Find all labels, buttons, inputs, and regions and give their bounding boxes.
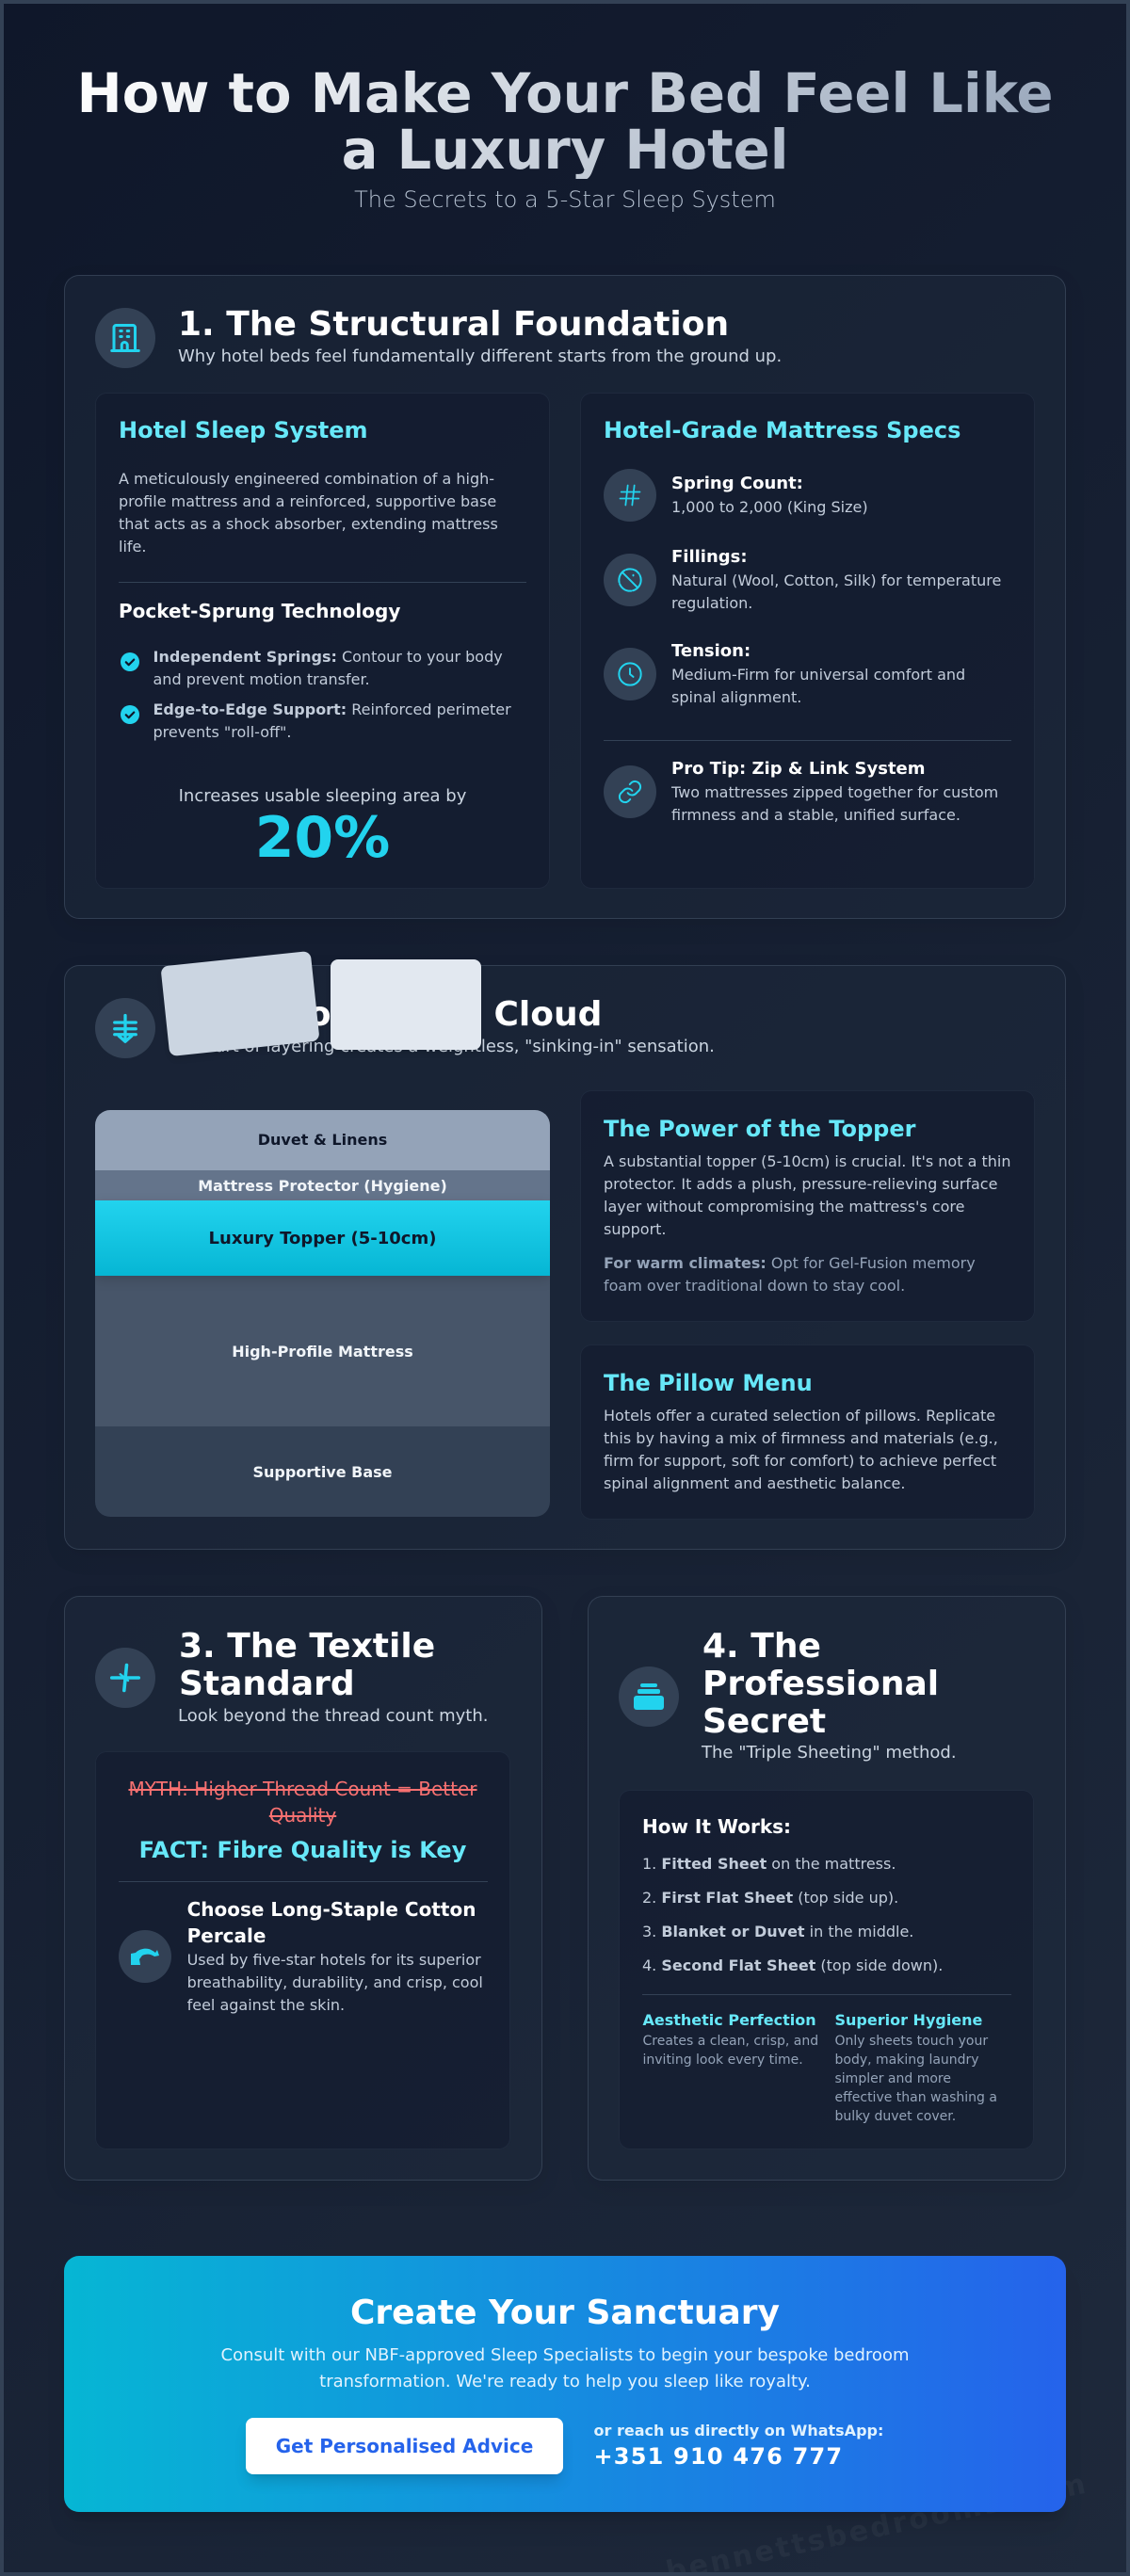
paragraph: profile mattress and a reinforced, supportive base (119, 492, 496, 510)
layer: base (95, 1426, 550, 1517)
benefit: hygiene: effective than washing a (834, 2090, 997, 2105)
panel: mattress specs: Medium-Firm for universal comfort and (671, 666, 965, 684)
bullet 1: Independent Springs: Contour to your body (153, 648, 503, 666)
layer: duvet: Duvet & Linens (258, 1130, 387, 1149)
heading: Professional (702, 1665, 939, 1703)
benefit: aesthetic (642, 2011, 818, 2068)
title: a Luxury Hotel (342, 119, 788, 182)
cta text: Consult with our NBF-approved Sleep Specialists to begin your bespoke bedroom (220, 2345, 910, 2365)
icon: sheets stack (619, 1666, 679, 1727)
header (76, 62, 1054, 213)
cta text (220, 2345, 910, 2391)
heading: 4. The (702, 1627, 821, 1666)
phone: +351 910 476 777 (593, 2443, 843, 2470)
subheading: Look beyond the thread count myth. (178, 1706, 488, 1726)
paragraph (604, 1407, 998, 1492)
panel: mattress specs: Natural (Wool, Cotton, Silk) for temperature (671, 572, 1001, 589)
benefit: aesthetic: inviting look every time. (642, 2053, 803, 2068)
cta text: transformation. We're ready to help you sleep like royalty. (319, 2372, 811, 2391)
title: How to Make Your Bed Feel Like (76, 62, 1054, 125)
myth: Quality (269, 1804, 336, 1827)
icon: check 2 (121, 705, 139, 724)
layer: protector (95, 1170, 550, 1200)
bullet 2: Edge-to-Edge Support: Reinforced perimeter (153, 700, 511, 718)
benefit: hygiene: body, making laundry (834, 2053, 979, 2068)
panel: pillow menu (580, 1344, 1035, 1520)
feature title: Percale (187, 1924, 266, 1947)
card heading: How It Works: (642, 1815, 791, 1838)
step 3: 3. Blanket or Duvet in the middle. (642, 1923, 913, 1940)
panel: mattress specs: 1,000 to 2,000 (King Size) (671, 498, 868, 516)
layer: mattress: High-Profile Mattress (232, 1343, 413, 1360)
paragraph: life. (119, 538, 146, 555)
icon: hash (604, 469, 656, 522)
paragraph: this by having a mix of firmness and materials (e.g., (604, 1429, 998, 1447)
bullet 1 (153, 648, 503, 688)
layer: topper: Luxury Topper (5-10cm) (209, 1228, 436, 1248)
icon: clock (604, 648, 656, 700)
paragraph: A substantial topper (5-10cm) is crucial. It's not a thin (604, 1152, 1010, 1170)
feature text: breathability, durability, and crisp, cool (187, 1973, 483, 1991)
icon: cotton (119, 1930, 171, 1983)
feature title (187, 1898, 476, 1947)
heading: 1. The Structural Foundation (178, 305, 729, 344)
subtitle: The Secrets to a 5-Star Sleep System (354, 186, 776, 213)
cta heading: Create Your Sanctuary (350, 2294, 780, 2332)
note: For warm climates: Opt for Gel-Fusion memory (604, 1254, 976, 1272)
layer: base: Supportive Base (252, 1463, 393, 1480)
benefit: hygiene: simpler and more (834, 2071, 951, 2086)
card heading: Hotel Sleep System (119, 417, 367, 443)
icon: weave (95, 1648, 155, 1708)
panel: mattress specs (580, 393, 1035, 889)
paragraph: protector. It adds a plush, pressure-relieving surface (604, 1175, 997, 1193)
icon: fillings (604, 554, 656, 606)
paragraph (604, 1152, 1010, 1238)
bullet 2 (153, 700, 511, 741)
spec: pro tip: Pro Tip: Zip & Link System (671, 759, 926, 779)
panel: section 1 structural foundation (64, 275, 1066, 919)
feature text: Used by five-star hotels for its superior (187, 1951, 481, 1969)
whatsapp label: or reach us directly on WhatsApp: (593, 2422, 883, 2439)
subheading: The art of layering creates a weightless, "sinking-in" sensation. (178, 1037, 715, 1056)
myth (128, 1778, 477, 1827)
button (246, 2418, 563, 2474)
stat value: 20% (255, 805, 390, 871)
paragraph (119, 470, 498, 555)
myth: MYTH: Higher Thread Count = Better (128, 1778, 477, 1800)
card heading: The Power of the Topper (604, 1116, 915, 1142)
benefit: hygiene: bulky duvet cover. (834, 2109, 956, 2124)
steps (642, 1855, 943, 1974)
panel: hotel sleep system (95, 393, 550, 889)
paragraph: Hotels offer a curated selection of pillows. Replicate (604, 1407, 995, 1425)
heading: 2. The Comfort (178, 995, 437, 1034)
icon: layers arrow (95, 998, 155, 1058)
paragraph: layer without compromising the mattress's core (604, 1198, 964, 1216)
paragraph: spinal alignment and aesthetic balance. (604, 1474, 905, 1492)
card heading: The Pillow Menu (604, 1370, 813, 1396)
benefit: hygiene: Superior Hygiene (834, 2011, 982, 2028)
bullet 1: and prevent motion transfer. (153, 670, 370, 688)
paragraph: that acts as a shock absorber, extending mattress (119, 515, 498, 533)
panel: mattress specs: Two mattresses zipped together for custom (671, 783, 998, 801)
panel: section 2 comfort cloud: Cloud (493, 995, 602, 1034)
layer: protector: Mattress Protector (Hygiene) (198, 1177, 447, 1194)
pillow: back (160, 950, 320, 1056)
step 4: 4. Second Flat Sheet (top side down). (642, 1956, 943, 1974)
benefit: aesthetic: Creates a clean, crisp, and (642, 2034, 818, 2049)
feature text (187, 1951, 483, 2014)
heading (179, 1627, 435, 1703)
icon: building (95, 308, 155, 368)
step 2: 2. First Flat Sheet (top side up). (642, 1889, 898, 1907)
benefit: hygiene: Only sheets touch your (834, 2034, 988, 2049)
panel: section 4 professional secret (588, 1596, 1066, 2181)
panel: section 2 comfort cloud (64, 965, 1066, 1550)
subheading: Why hotel beds feel fundamentally different starts from the ground up. (178, 346, 782, 366)
spec: spring count: Spring Count: (671, 474, 803, 493)
paragraph: support. (604, 1220, 667, 1238)
step 1: 1. Fitted Sheet on the mattress. (642, 1855, 896, 1873)
heading (178, 995, 602, 1034)
button: Get Personalised Advice (276, 2435, 533, 2457)
subheading: The "Triple Sheeting" method. (702, 1743, 957, 1763)
icon: link (604, 765, 656, 818)
note (604, 1254, 976, 1295)
panel: mattress specs: spinal alignment. (671, 688, 801, 706)
heading: Secret (702, 1702, 826, 1741)
benefit: aesthetic: Aesthetic Perfection (642, 2011, 816, 2028)
feature text: feel against the skin. (187, 1996, 345, 2014)
heading: Standard (179, 1665, 355, 1703)
paragraph: firm for support, soft for comfort) to achieve perfect (604, 1452, 996, 1470)
pillow: front (331, 959, 481, 1050)
panel: myth and fact (95, 1751, 510, 2149)
panel: topper (580, 1090, 1035, 1322)
panel: mattress specs: firmness and a stable, unified surface. (671, 806, 960, 824)
panel: call to action (64, 2256, 1066, 2512)
panel: mattress specs: regulation. (671, 594, 752, 612)
sub heading: Pocket-Sprung Technology (119, 600, 400, 622)
layer: topper (95, 1200, 550, 1276)
note: foam over traditional down to stay cool. (604, 1277, 905, 1295)
layer: mattress (95, 1276, 550, 1426)
icon: check 1 (121, 652, 139, 671)
title (76, 62, 1054, 182)
panel: section 3 textile standard (64, 1596, 542, 2181)
fact: FACT: Fibre Quality is Key (139, 1837, 466, 1863)
layer: duvet (95, 1110, 550, 1170)
chart: bed layers (95, 1110, 550, 1517)
stat label: Increases usable sleeping area by (179, 786, 466, 806)
benefit: hygiene (834, 2011, 997, 2124)
spec: fillings: Fillings: (671, 547, 748, 567)
heading: 3. The Textile (179, 1627, 435, 1666)
paragraph: A meticulously engineered combination of a high- (119, 470, 494, 488)
bullet 2: prevents "roll-off". (153, 723, 291, 741)
heading (702, 1627, 939, 1741)
panel: how it works (619, 1790, 1034, 2149)
feature title: Choose Long-Staple Cotton (187, 1898, 476, 1921)
spec: tension: Tension: (671, 641, 751, 661)
card heading: Hotel-Grade Mattress Specs (604, 417, 960, 443)
